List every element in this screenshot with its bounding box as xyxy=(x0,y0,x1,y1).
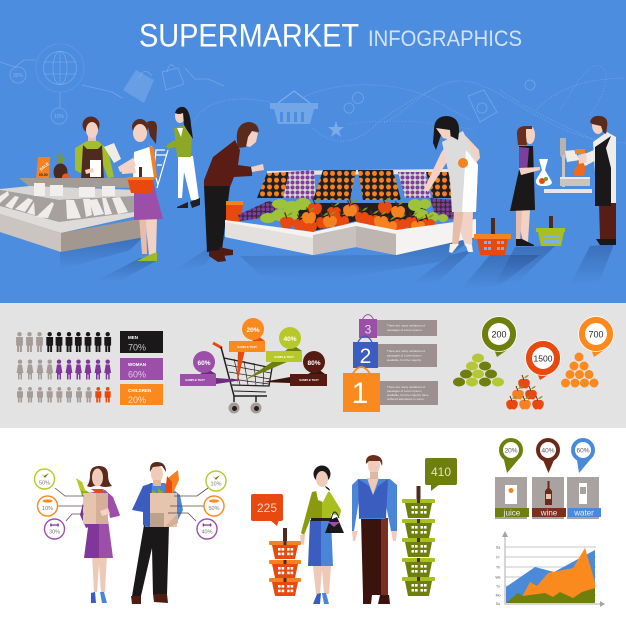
panel: numbered shopping bags xyxy=(343,314,438,412)
cart wire xyxy=(154,150,168,188)
circle: bread 50%: 50% xyxy=(208,506,220,512)
pin chart: 200 green fruit xyxy=(453,316,516,386)
figure: cashier xyxy=(75,116,114,180)
panel: shopper share pictograms xyxy=(16,332,111,402)
figure: woman choosing fruit xyxy=(424,116,480,253)
area chart: weekly sales xyxy=(495,531,605,607)
circle: fish 30%: 30% xyxy=(49,530,60,536)
callout: 80%: 80% xyxy=(307,360,321,367)
note 2: There are many variations of xyxy=(387,349,425,353)
panel: supermarket scene background xyxy=(0,0,626,303)
chart: shopping cart callouts xyxy=(180,318,327,414)
callout: 40%: 40% xyxy=(283,336,297,343)
green apples xyxy=(260,198,448,223)
callout group: man's purchases xyxy=(168,471,226,539)
callout: 20% xyxy=(229,318,265,384)
icon: orange basket near stand xyxy=(226,201,243,221)
callout group: woman's purchases xyxy=(34,469,84,539)
legend: woman: 60% xyxy=(128,370,146,380)
callout: 60% xyxy=(180,351,243,386)
card: wine xyxy=(532,477,566,519)
figure: man leaning over fruit stand xyxy=(204,122,264,262)
pin chart: 200 green fruit: 200 xyxy=(491,330,507,340)
faint percent labels xyxy=(13,73,65,120)
axis labels: Tu xyxy=(496,584,500,588)
note 3 xyxy=(377,320,437,336)
card: juice: juice xyxy=(503,508,521,518)
note 1: There are many variations of xyxy=(387,385,425,389)
callout: 40% xyxy=(245,327,302,380)
legend: men: 70% xyxy=(128,342,146,352)
pin chart: 1500 apples: 1500 xyxy=(534,354,553,364)
axis labels: Fr xyxy=(496,556,500,560)
figure: butcher xyxy=(578,116,616,245)
panel: shoppers section background xyxy=(0,428,626,626)
legend: children xyxy=(120,384,163,405)
pin: water 60% xyxy=(571,438,595,473)
axis labels: We xyxy=(495,576,501,580)
icon: faint shopping basket xyxy=(270,91,318,124)
note 3: passages of Lorem Ipsum. xyxy=(387,328,423,332)
icon: green basket stack xyxy=(402,486,435,596)
icon: faint star xyxy=(328,121,344,137)
icon: shopping cart xyxy=(213,343,272,414)
figure: woman with basket xyxy=(104,119,163,261)
pin chart: 700 oranges: 700 xyxy=(588,330,604,340)
pin: water 60%: 60% xyxy=(576,448,590,454)
row: men 70% xyxy=(16,332,111,352)
card: wine: wine xyxy=(540,508,558,518)
title: SUPERMARKET xyxy=(139,18,359,54)
icon: weighing scale xyxy=(544,138,592,193)
note 1: available, but the majority have xyxy=(387,393,429,397)
title: INFOGRAPHICS xyxy=(368,26,522,51)
axis labels: Mo xyxy=(496,594,500,598)
axis labels: Su xyxy=(496,602,500,606)
icon: orange xyxy=(62,174,70,182)
legend: men xyxy=(120,331,163,353)
title xyxy=(139,18,522,54)
floor shadows xyxy=(60,234,614,290)
note 1 xyxy=(380,381,438,405)
stand back rim xyxy=(267,169,452,175)
faint percent labels: 10% xyxy=(54,114,65,120)
display goods xyxy=(0,191,128,219)
bag 3: 3 xyxy=(365,322,372,336)
legend: men: MEN xyxy=(128,335,138,340)
callout: 60%: SAMPLE TEXT xyxy=(185,378,205,382)
axis labels: Sa xyxy=(496,546,500,550)
packages on counter xyxy=(34,183,115,197)
bag 2: 2 xyxy=(360,345,371,368)
pin: wine 40%: 40% xyxy=(541,448,555,454)
callout: 80% xyxy=(263,351,327,386)
figure: man in blue vest xyxy=(352,455,397,604)
card: water xyxy=(567,477,601,519)
pin chart: 700 oranges xyxy=(561,316,614,388)
icon: sale sign: 00-00 xyxy=(39,173,48,177)
note 1: suffered alterations in some. xyxy=(387,397,425,401)
icon: green basket on floor xyxy=(536,216,565,246)
callout: 410 baskets xyxy=(425,458,457,491)
icon: sale sign xyxy=(36,157,50,179)
panel: statistics band background xyxy=(0,303,626,428)
icon: sale sign: SALE xyxy=(38,161,50,172)
note 2: passages of Lorem Ipsum xyxy=(387,354,422,358)
card: water: water xyxy=(573,508,594,518)
callout: 60%: 60% xyxy=(197,360,211,367)
note 3: There are many variations of xyxy=(387,324,425,328)
card: juice xyxy=(495,477,529,519)
circle: fish 40%: 40% xyxy=(201,530,213,536)
orange area xyxy=(523,548,595,603)
row: children 20% xyxy=(17,387,111,402)
faint percent labels: 30% xyxy=(13,73,24,79)
callout: 225 baskets: 225 xyxy=(257,501,277,515)
orange pile xyxy=(561,352,598,388)
legend: children: CHILDREN xyxy=(128,388,151,393)
note 2: available, but the majority xyxy=(387,358,422,362)
figure: woman with grocery bag xyxy=(76,466,120,603)
callout: 20%: 20% xyxy=(246,327,260,334)
icon: produce bag xyxy=(536,159,552,186)
blue area xyxy=(506,550,595,603)
row: women 60% xyxy=(17,360,111,380)
legend: woman xyxy=(120,358,163,380)
note 1: passages of Lorem Ipsum xyxy=(387,389,422,393)
legend: children: 20% xyxy=(128,395,146,405)
icon: orange basket on floor xyxy=(474,218,511,255)
circle: vegetables 10%: 10% xyxy=(210,482,222,488)
axes xyxy=(505,536,602,604)
background decoration: faint icons and dotted curves xyxy=(0,44,626,143)
callout: 80%: SAMPLE TEXT xyxy=(299,378,319,382)
fruit trays back row xyxy=(257,172,289,198)
icon: orange basket stack xyxy=(269,528,301,596)
legend: woman: WOMAN xyxy=(128,362,146,367)
figure: woman pushing cart xyxy=(150,107,200,208)
axis labels xyxy=(495,546,501,606)
fruit stand xyxy=(225,169,476,255)
olive area xyxy=(506,588,595,603)
pin: wine 40% xyxy=(536,438,560,473)
callout: 410 baskets: 410 xyxy=(431,465,451,479)
figure: man with grocery bag xyxy=(131,462,183,604)
pin chart: 1500 apples xyxy=(506,340,560,410)
deli counter xyxy=(0,178,145,252)
callout: 20%: SAMPLE TEXT xyxy=(237,345,257,349)
figure: woman with handbag xyxy=(300,466,344,604)
figure: woman at scale xyxy=(510,126,540,246)
bag 1: 1 xyxy=(352,377,368,410)
apple pile xyxy=(506,375,544,410)
front dark tray and apples xyxy=(296,203,432,231)
icon: pineapple xyxy=(54,151,68,180)
grapes front xyxy=(238,201,285,221)
circle: vegetables 50%: 50% xyxy=(39,480,50,486)
pin: juice 20%: 20% xyxy=(504,448,518,454)
stand base xyxy=(225,219,476,255)
axis labels: Th xyxy=(496,566,500,570)
pin: juice 20% xyxy=(499,438,523,473)
circle: bread 10%: 10% xyxy=(42,506,53,512)
callout: 225 baskets xyxy=(251,494,283,526)
grid lines xyxy=(505,547,596,595)
note 2 xyxy=(378,344,437,367)
green fruit pile xyxy=(453,354,504,386)
callout: 40%: SAMPLE TEXT xyxy=(274,355,294,359)
